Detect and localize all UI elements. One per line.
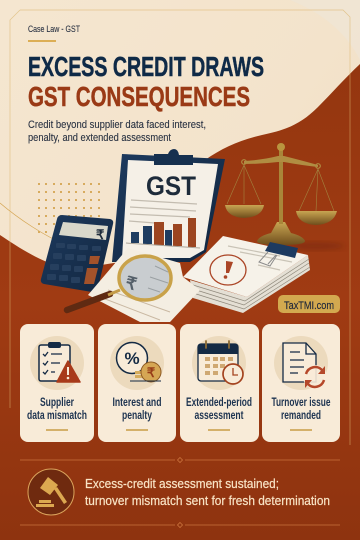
magnifying glass over report: ₹ xyxy=(123,273,139,294)
label: remanded xyxy=(281,410,321,422)
label xyxy=(112,397,162,422)
label: Turnover issue xyxy=(272,397,330,409)
label: Supplier xyxy=(40,397,74,409)
icon: percent and coins xyxy=(110,336,164,390)
conclusion text xyxy=(85,476,330,508)
icon: percent and coins: ₹ xyxy=(147,365,156,380)
label: Interest and xyxy=(112,397,162,409)
icon: calendar and clock xyxy=(192,336,246,390)
label: Extended-period xyxy=(186,397,252,409)
subtitle xyxy=(28,119,206,144)
card: interest and penalty xyxy=(98,324,176,442)
label: penalty xyxy=(122,410,152,422)
eyebrow: Case Law - GST: Case Law - GST xyxy=(28,24,80,35)
calculator: ₹ xyxy=(96,227,105,242)
clipboard with GST report xyxy=(112,149,225,262)
binder clip xyxy=(259,242,298,266)
title xyxy=(28,51,264,112)
conclusion text: turnover mismatch sent for fresh determination xyxy=(85,493,330,508)
label: assessment xyxy=(194,410,244,422)
badge: TaxTMI.com xyxy=(278,295,340,313)
card: extended-period assessment xyxy=(180,324,259,442)
label xyxy=(272,397,330,422)
label: data mismatch xyxy=(27,410,87,422)
alert mark xyxy=(210,255,246,285)
icon: document with refresh arrows xyxy=(274,336,328,390)
clipboard clip xyxy=(154,149,193,165)
subtitle: Credit beyond supplier data faced interest, xyxy=(28,119,206,131)
GST label: GST xyxy=(146,171,196,201)
icon: checklist with warning xyxy=(30,336,84,390)
title: GST CONSEQUENCES xyxy=(28,81,250,112)
eyebrow: Case Law - GST xyxy=(28,24,80,42)
badge: TaxTMI.com: TaxTMI.com xyxy=(284,300,334,312)
icon: scales of justice xyxy=(225,143,345,250)
calculator xyxy=(41,215,113,292)
icon: percent and coins: % xyxy=(124,349,140,368)
dot pattern xyxy=(38,183,100,233)
bar chart xyxy=(126,218,200,248)
label xyxy=(186,397,252,422)
document stack with alert xyxy=(183,236,310,313)
icon: gavel xyxy=(28,469,74,515)
card: supplier data mismatch xyxy=(20,324,94,442)
subtitle: penalty, and extended assessment xyxy=(28,132,171,144)
title: EXCESS CREDIT DRAWS xyxy=(28,51,264,82)
conclusion text: Excess-credit assessment sustained; xyxy=(85,476,279,491)
card: turnover issue remanded xyxy=(262,324,340,442)
label xyxy=(27,397,87,422)
magnifying glass over report xyxy=(67,248,200,322)
footer dividers xyxy=(20,458,340,528)
